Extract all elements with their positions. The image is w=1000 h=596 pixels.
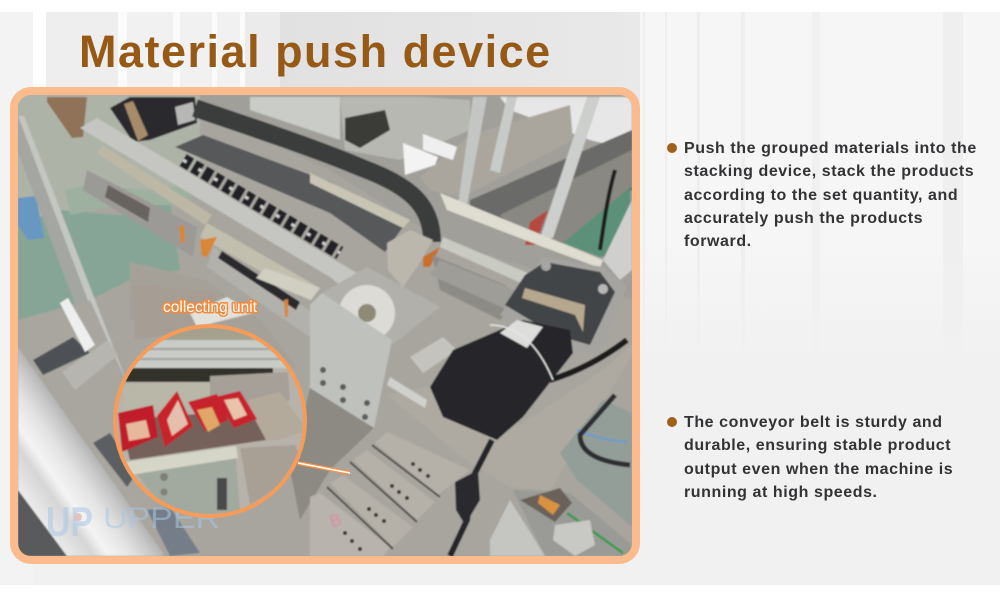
text block: conveyor belt: The conveyor belt is sturdy and [684, 414, 943, 431]
bracket lower-left plate [290, 388, 374, 520]
air cylinder [410, 337, 457, 373]
text block: conveyor belt: running at high speeds. [684, 484, 878, 501]
title: Material push device [79, 26, 552, 77]
second motor [430, 257, 627, 440]
guide black inner chain [183, 160, 340, 253]
black cable bundle [450, 440, 492, 556]
magnified circle: collecting unit [113, 324, 307, 518]
machine photo illustration [18, 95, 632, 556]
top-left motor [110, 97, 197, 142]
left diagonal post [18, 120, 88, 304]
chain bracket [387, 230, 433, 287]
lower carriage and rails [83, 170, 197, 257]
callout label: collecting unit: collecting unit [163, 299, 258, 316]
text block: pushing materials: according to the set quantity, and [684, 187, 958, 204]
text block: pushing materials: stacking device, stack the products [684, 163, 974, 180]
text block: pushing materials: forward. [684, 233, 752, 250]
text block: pushing materials: accurately push the products [684, 210, 923, 227]
leader line [298, 463, 350, 473]
bullet dot 2 [667, 417, 677, 427]
lower-left conveyor slots [18, 300, 124, 385]
upper white belt [80, 118, 356, 284]
drag chain lower [175, 135, 403, 252]
white foreground tube [18, 347, 163, 556]
watermark [48, 507, 218, 536]
large silver plate under motor [387, 345, 632, 490]
back-left area [18, 95, 200, 216]
conveyor trays [310, 432, 470, 556]
text block: conveyor belt: durable, ensuring stable product [684, 437, 951, 454]
glass bottom-right [560, 400, 632, 527]
text block: conveyor belt [684, 414, 953, 501]
text block: pushing materials [684, 140, 977, 250]
text block: pushing materials: Push the grouped materials into the [684, 140, 977, 157]
orange carriage stops [200, 237, 217, 257]
bullet dot 1 [667, 143, 677, 153]
text block: conveyor belt: output even when the machine is [684, 461, 953, 478]
panel: photo frame [10, 87, 640, 564]
bottom-right rails [513, 490, 632, 556]
snack packets [118, 391, 257, 452]
watermark: UPPER [103, 502, 220, 535]
guide rail beside motor [387, 377, 427, 408]
rail behind bracket [431, 254, 506, 320]
back-right area [200, 95, 632, 300]
watermark: UP [46, 498, 93, 545]
drag chain upper [195, 108, 432, 242]
tan toothed belts [97, 146, 212, 225]
conveyor trays: B [327, 510, 344, 531]
front pulley bracket [310, 267, 440, 428]
